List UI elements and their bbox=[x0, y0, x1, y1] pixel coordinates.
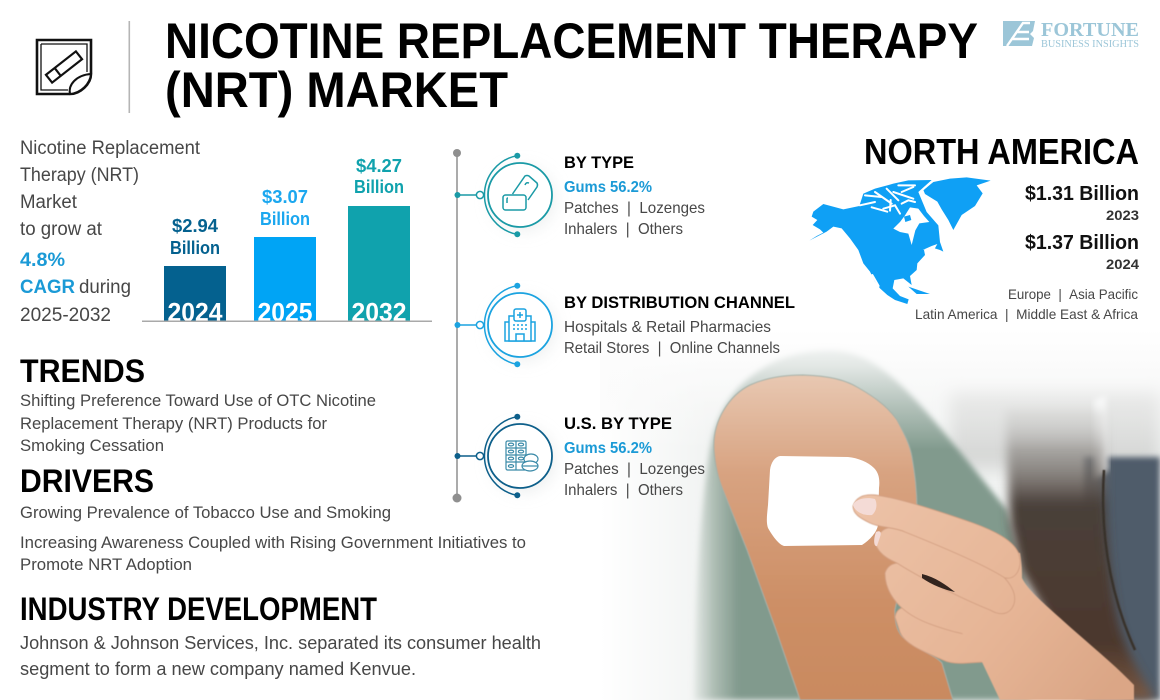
text: U.S. by type: U.S. BY TYPE bbox=[564, 414, 672, 433]
text: U.S. by type bbox=[564, 414, 705, 499]
text block: market growth: Therapy (NRT) bbox=[20, 165, 139, 186]
arm bbox=[714, 375, 953, 700]
text: by distribution channel: BY DISTRIBUTION CHANNEL bbox=[564, 293, 795, 312]
trends: Smoking Cessation bbox=[20, 436, 164, 455]
divider bbox=[128, 21, 130, 113]
industry development: Johnson & Johnson Services, Inc. separated its consumer health bbox=[20, 633, 541, 653]
nails bbox=[853, 498, 876, 515]
trends bbox=[20, 353, 376, 455]
logo: Fortune Business Insights: FORTUNE bbox=[1041, 19, 1139, 41]
text block: market growth: CAGR bbox=[20, 277, 75, 298]
text block: market growth: 2025-2032 bbox=[20, 305, 111, 326]
bar 2024 bbox=[164, 216, 226, 327]
map: North America bbox=[809, 177, 991, 304]
stats: North America values bbox=[1025, 183, 1139, 272]
photo: arm with nicotine patch bbox=[600, 330, 1160, 700]
industry development: segment to form a new company named Kenvue. bbox=[20, 659, 416, 679]
stats: North America values: $1.37 Billion bbox=[1025, 232, 1139, 254]
text block: market growth: Market bbox=[20, 192, 78, 213]
text: by type: Inhalers | Others bbox=[564, 221, 683, 238]
bar 2025: $3.07 bbox=[262, 187, 308, 207]
text: by type: BY TYPE bbox=[564, 153, 634, 172]
stats: North America values: 2024 bbox=[1106, 256, 1139, 272]
bar 2032: Billion bbox=[354, 177, 404, 197]
bar 2024: $2.94 bbox=[172, 216, 218, 236]
heading: North America: NORTH AMERICA bbox=[864, 131, 1139, 172]
text: by type: Gums 56.2% bbox=[564, 179, 652, 196]
text block: market growth: Nicotine Replacement bbox=[20, 138, 201, 159]
hand bbox=[853, 495, 1134, 700]
drivers: DRIVERS bbox=[20, 463, 154, 499]
stats: North America values: $1.31 Billion bbox=[1025, 183, 1139, 205]
icon: by distribution channel bbox=[454, 283, 555, 367]
drivers bbox=[20, 463, 526, 574]
bar 2024: 2024 bbox=[168, 297, 223, 327]
text: by type bbox=[564, 153, 705, 238]
bar 2024: Billion bbox=[170, 238, 220, 258]
map: bays and channels bbox=[860, 180, 937, 286]
text: by distribution channel bbox=[564, 293, 795, 357]
icon: U.S. by type bbox=[454, 414, 555, 498]
trends: Shifting Preference Toward Use of OTC Nicotine bbox=[20, 391, 376, 410]
text block: market growth: 4.8% bbox=[20, 250, 65, 271]
bar 2032: $4.27 bbox=[356, 156, 402, 176]
text: by distribution channel: Hospitals & Retail Pharmacies bbox=[564, 319, 771, 336]
title bbox=[165, 13, 978, 118]
text: U.S. by type: Patches | Lozenges bbox=[564, 461, 705, 478]
stats: North America values: 2023 bbox=[1106, 207, 1139, 223]
patch bbox=[767, 456, 879, 546]
bar 2032 bbox=[348, 156, 410, 327]
title: NICOTINE REPLACEMENT THERAPY bbox=[165, 13, 978, 69]
bar chart: market size bbox=[142, 156, 432, 327]
text: U.S. by type: Gums 56.2% bbox=[564, 440, 652, 457]
text: by distribution channel: Retail Stores | Online Channels bbox=[564, 340, 780, 357]
text: by type: Patches | Lozenges bbox=[564, 200, 705, 217]
industry development bbox=[20, 591, 541, 679]
trends: TRENDS bbox=[20, 353, 145, 389]
text block: market growth: during bbox=[79, 277, 131, 298]
bar 2025 bbox=[254, 187, 316, 327]
text: other regions: Europe | Asia Pacific bbox=[1008, 286, 1138, 302]
timeline spine bbox=[452, 149, 462, 502]
drivers: Growing Prevalence of Tobacco Use and Smoking bbox=[20, 503, 391, 522]
industry development: INDUSTRY DEVELOPMENT bbox=[20, 591, 377, 627]
drivers: Promote NRT Adoption bbox=[20, 555, 192, 574]
text: U.S. by type: Inhalers | Others bbox=[564, 482, 683, 499]
title: (NRT) MARKET bbox=[165, 62, 508, 118]
text: other regions bbox=[915, 286, 1138, 322]
text: other regions: Latin America | Middle East & Africa bbox=[915, 306, 1138, 322]
drivers: Increasing Awareness Coupled with Rising Government Initiatives to bbox=[20, 533, 526, 552]
bar 2025: Billion bbox=[260, 209, 310, 229]
trends: Replacement Therapy (NRT) Products for bbox=[20, 414, 327, 433]
text block: market growth bbox=[20, 138, 201, 326]
text block: market growth: to grow at bbox=[20, 219, 103, 240]
icon: by type bbox=[454, 153, 555, 237]
logo: Fortune Business Insights: BUSINESS INSIGHTS bbox=[1041, 39, 1139, 50]
bar 2025: 2025 bbox=[258, 297, 312, 327]
bar 2032: 2032 bbox=[352, 297, 406, 327]
logo: Fortune Business Insights bbox=[1003, 19, 1139, 50]
icon: patch document bbox=[37, 40, 91, 94]
